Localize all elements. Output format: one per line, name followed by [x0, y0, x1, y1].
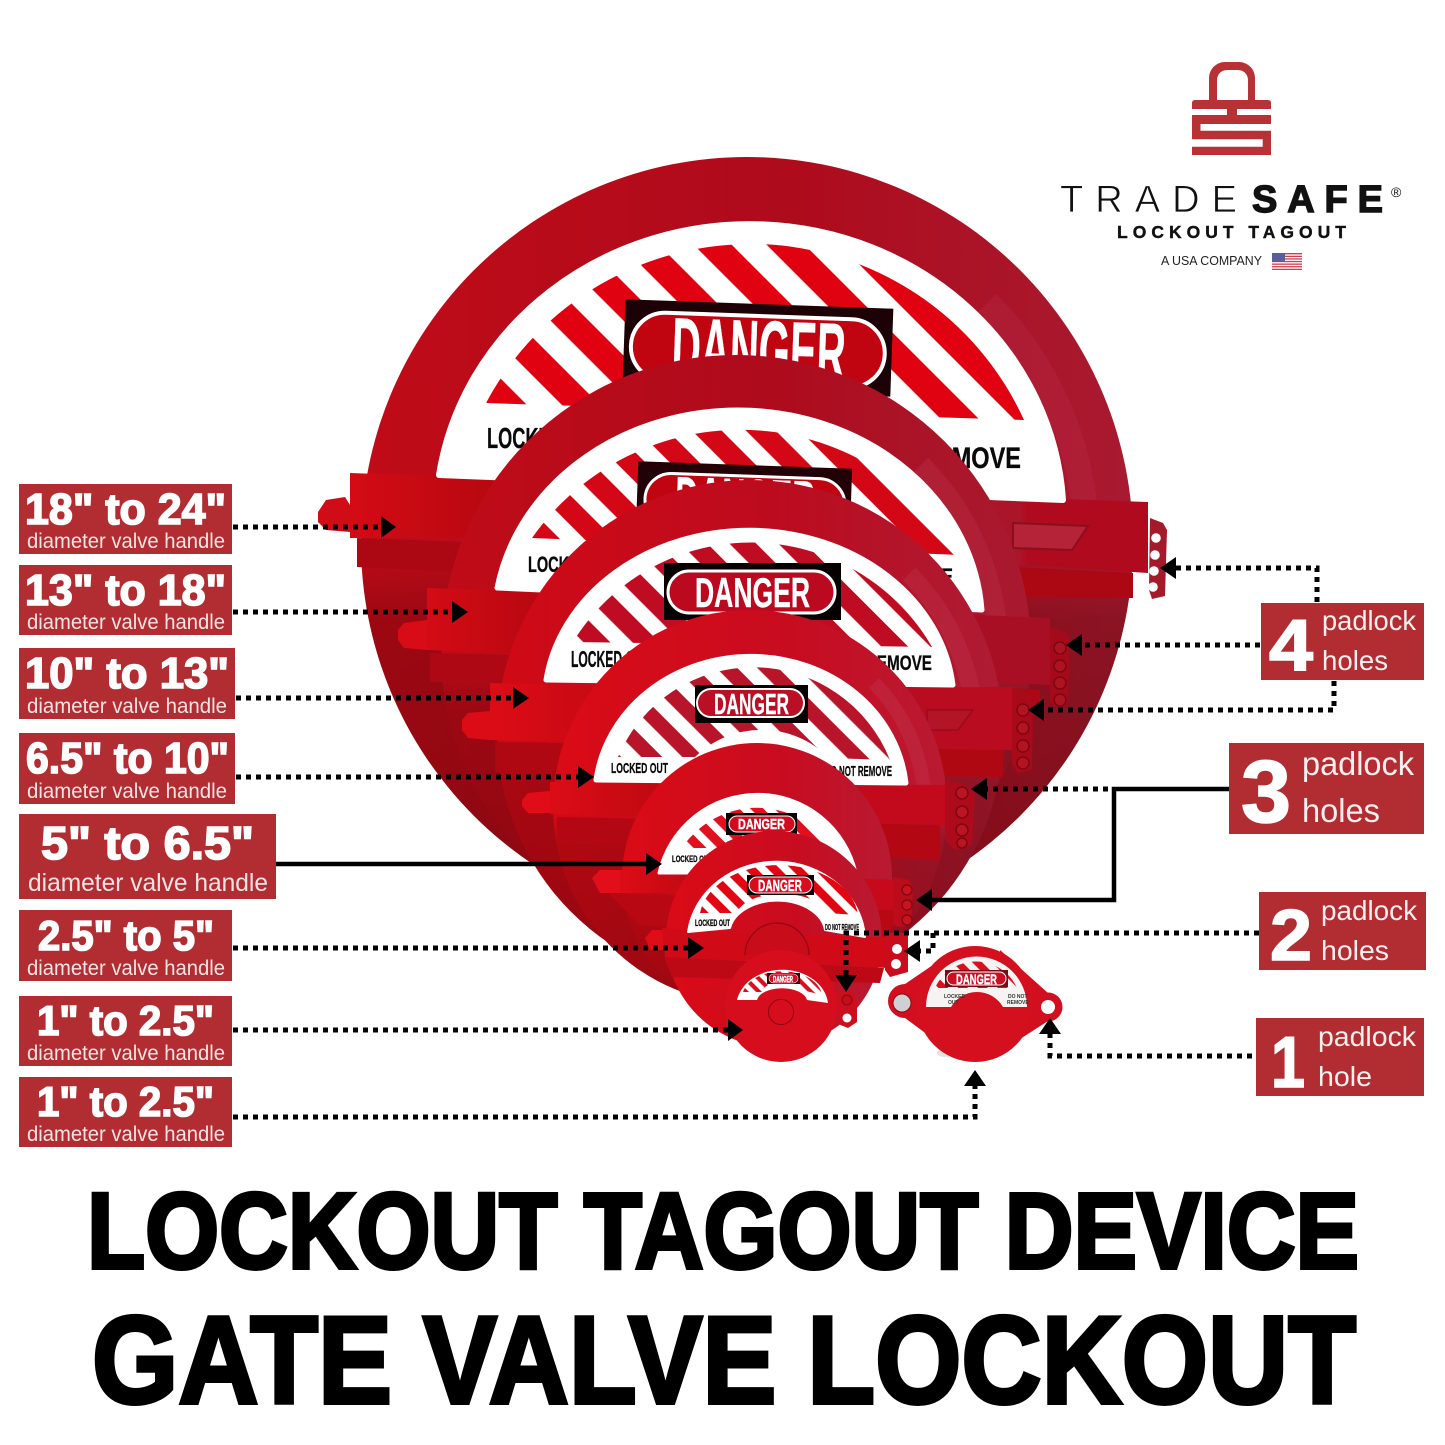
size label: 18 to 24 inch: 18" to 24" [25, 485, 226, 534]
padlock label: 2 holes: padlock [1321, 895, 1418, 926]
device: 13 to 18 inch gate valve lockout: LOCKED OUT [528, 552, 624, 577]
device: 6.5 to 10 inch gate valve lockout: DO NOT REMOVE [825, 763, 892, 780]
device: 1 to 2.5 inch cap style gate valve lockout: LOCKED [944, 994, 966, 1000]
danger sign [695, 685, 808, 723]
arrow: 2 holes to seventh device [904, 933, 933, 962]
device: 10 to 13 inch gate valve lockout: DO NOT REMOVE [802, 652, 932, 675]
size label: 13 to 18 inch [19, 565, 232, 635]
padlock label: 2 holes [1259, 892, 1426, 976]
device: 2.5 to 5 inch gate valve lockout: DO NOT REMOVE [825, 922, 859, 932]
danger sign: DANGER [714, 689, 789, 721]
device: 2.5 to 5 inch gate valve lockout: LOCKED OUT [695, 918, 730, 928]
padlock label: 1 hole: hole [1318, 1061, 1372, 1092]
danger sign: DANGER [773, 975, 793, 984]
device: 6.5 to 10 inch gate valve lockout [522, 610, 975, 1004]
device: 1 to 2.5 inch gate valve lockout with tabs [715, 950, 857, 1062]
logo: Lockout Tagout tagline: LOCKOUT TAGOUT [1117, 222, 1346, 242]
arrow: 1 hole to cap device [1039, 1018, 1252, 1056]
danger sign [767, 973, 800, 984]
padlock label: 3 holes [1229, 742, 1424, 841]
padlock label: 1 hole: 1 [1271, 1023, 1305, 1103]
padlock label: 4 holes [1261, 603, 1424, 686]
logo: TradeSafe padlock mark [1192, 62, 1271, 155]
arrow: 2.5 to 5 inch [233, 937, 704, 959]
padlock label: 4 holes: padlock [1322, 605, 1417, 636]
padlock label: 1 hole: padlock [1318, 1021, 1417, 1052]
danger sign: DANGER [738, 816, 785, 833]
device: 1 to 2.5 inch cap style gate valve lockout: REMOVE [1007, 1000, 1029, 1006]
white label with stripes [688, 862, 865, 937]
size label: 6.5 to 10 inch [19, 733, 235, 804]
size label: 2.5 to 5 inch: diameter valve handle [27, 957, 225, 980]
danger sign: DANGER [695, 569, 810, 616]
logo: TradeSafe wordmark: ® [1391, 184, 1402, 200]
white label with stripes [659, 794, 856, 873]
logo: TradeSafe wordmark: SAFE [1252, 179, 1383, 221]
danger sign [622, 298, 893, 402]
device: 18 to 24 inch gate valve lockout: DO NOT REMOVE [821, 442, 1021, 475]
size label: 10 to 13 inch: diameter valve handle [27, 695, 227, 718]
white label with stripes [596, 656, 906, 783]
size label: 1 to 2.5 inch cap style: diameter valve handle [27, 1123, 225, 1146]
size label: 2.5 to 5 inch [19, 910, 232, 981]
padlock label: 2 holes: 2 [1270, 896, 1312, 976]
size label: 1 to 2.5 inch: 1" to 2.5" [37, 997, 214, 1044]
danger sign [726, 813, 797, 835]
icon: US flag [1272, 253, 1302, 270]
device: 18 to 24 inch gate valve lockout [318, 157, 1167, 929]
logo: TradeSafe wordmark: TRADE [1060, 179, 1237, 221]
size label: 5 to 6.5 inch [19, 814, 276, 899]
device: 5 to 6.5 inch gate valve lockout [592, 743, 913, 1013]
device: 2.5 to 5 inch gate valve lockout [645, 831, 908, 1047]
danger sign: DANGER [956, 971, 997, 987]
logo: TradeSafe wordmark [1060, 179, 1402, 221]
logo: A USA Company: A USA COMPANY [1161, 254, 1263, 268]
arrow: 3 holes to fifth device [916, 789, 1229, 911]
device: 18 to 24 inch gate valve lockout: LOCKED OUT [487, 423, 607, 455]
arrow: 4 holes to third device [1028, 681, 1334, 721]
white label with stripes [439, 224, 1063, 500]
size label: 1 to 2.5 inch: diameter valve handle [27, 1042, 225, 1065]
arrow: 13 to 18 inch [233, 601, 468, 623]
size label: 5 to 6.5 inch: 5" to 6.5" [41, 817, 254, 869]
arrow: 1 to 2.5 inch [233, 1019, 743, 1041]
size label: 13 to 18 inch: diameter valve handle [27, 611, 225, 634]
padlock label: 4 holes: 4 [1269, 606, 1313, 686]
padlock label: 3 holes: 3 [1241, 742, 1291, 841]
white label with stripes [546, 530, 953, 685]
device: 13 to 18 inch gate valve lockout [398, 355, 1070, 945]
device: 1 to 2.5 inch cap style gate valve lockout [888, 946, 1062, 1062]
size label: 10 to 13 inch: 10" to 13" [25, 649, 229, 698]
padlock label: 1 hole [1256, 1018, 1424, 1103]
danger sign [945, 970, 1008, 987]
device: 1 to 2.5 inch cap style gate valve lockout: DO NOT [1008, 994, 1027, 1000]
device: 13 to 18 inch gate valve lockout: DO NOT REMOVE [803, 564, 953, 589]
danger sign: DANGER [758, 878, 802, 895]
padlock label: 2 holes: holes [1321, 935, 1389, 966]
size label: 2.5 to 5 inch: 2.5" to 5" [38, 912, 214, 959]
size label: 6.5 to 10 inch: 6.5" to 10" [26, 734, 229, 783]
danger sign [636, 461, 852, 540]
white label with stripes [497, 410, 982, 610]
danger sign: DANGER [670, 300, 847, 400]
arrow: 1 to 2.5 inch cap style [233, 1070, 986, 1117]
arrow: 10 to 13 inch [236, 687, 529, 709]
device: 1 to 2.5 inch cap style gate valve lockout: OUT [948, 1000, 959, 1006]
size label: 6.5 to 10 inch: diameter valve handle [27, 780, 227, 803]
arrow: 5 to 6.5 inch [276, 853, 662, 875]
white label with stripes [737, 970, 828, 1003]
device: 10 to 13 inch gate valve lockout [462, 480, 1033, 986]
padlock label: 3 holes: holes [1302, 792, 1380, 829]
danger sign [664, 563, 841, 620]
size label: 10 to 13 inch [19, 648, 235, 719]
padlock label: 3 holes: padlock [1302, 745, 1414, 782]
arrow: 6.5 to 10 inch [236, 766, 594, 788]
padlock label: 4 holes: holes [1322, 645, 1388, 676]
size label: 13 to 18 inch: 13" to 18" [25, 566, 226, 615]
arrow: 4 holes to largest device [1160, 557, 1317, 602]
arrow: 4 holes to second device [1066, 634, 1260, 656]
size label: 18 to 24 inch: diameter valve handle [27, 530, 225, 553]
size label: 1 to 2.5 inch cap style [19, 1077, 232, 1147]
danger sign: DANGER [674, 465, 816, 538]
size label: 1 to 2.5 inch cap style: 1" to 2.5" [37, 1078, 214, 1125]
arrow: 3 holes to fourth device [971, 778, 1108, 800]
white label with stripes [926, 956, 1027, 1007]
arrow: 18 to 24 inch [233, 516, 396, 538]
device: 6.5 to 10 inch gate valve lockout: LOCKED OUT [611, 760, 668, 777]
size label: 1 to 2.5 inch [19, 996, 232, 1066]
device: 5 to 6.5 inch gate valve lockout: LOCKED OUT [672, 854, 712, 864]
size label: 18 to 24 inch [19, 484, 232, 554]
size label: 5 to 6.5 inch: diameter valve handle [28, 869, 268, 897]
arrow: 2 holes to sixth device [835, 933, 1259, 992]
danger sign [747, 875, 814, 895]
device: 10 to 13 inch gate valve lockout: LOCKED OUT [571, 646, 651, 672]
